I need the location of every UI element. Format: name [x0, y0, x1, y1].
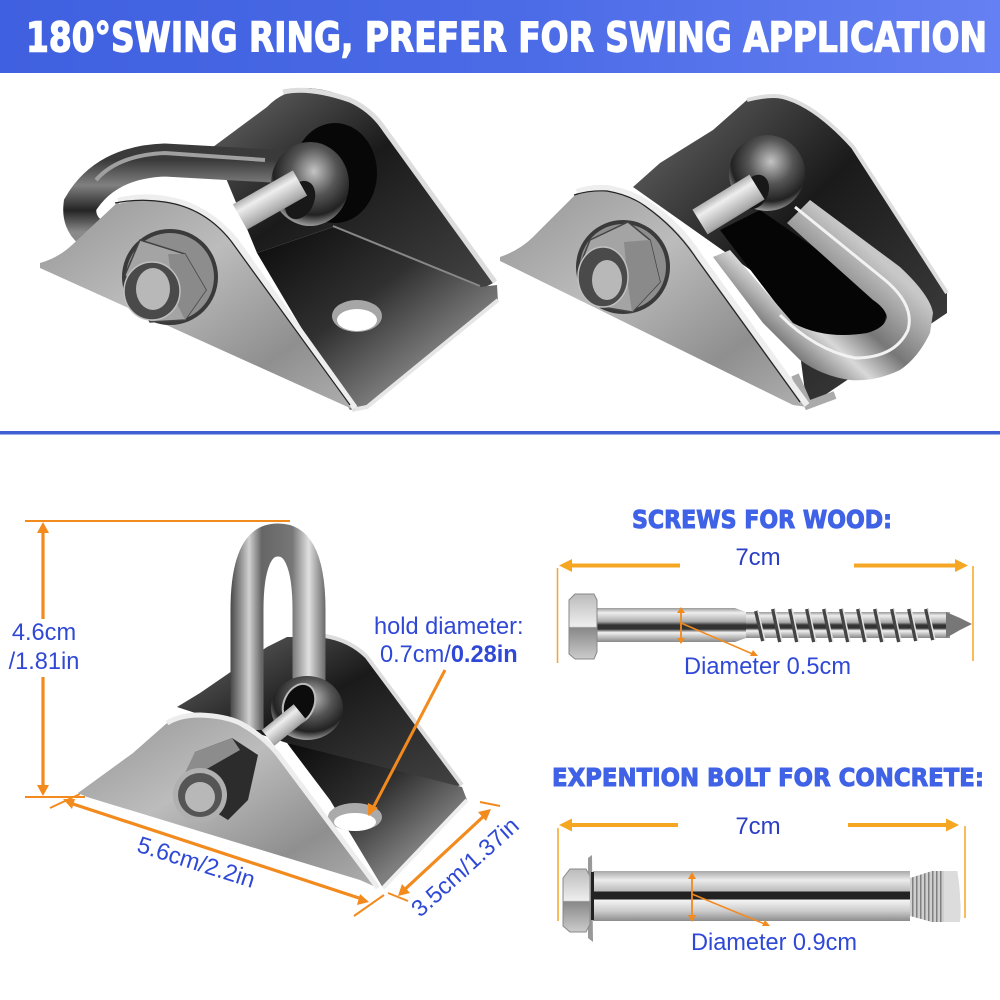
expansion bolt: [563, 855, 960, 942]
header banner: [0, 0, 1000, 73]
product photo: hook with shackle folded right: [500, 96, 947, 407]
callout arrow: [368, 670, 445, 816]
front plate: [78, 715, 378, 888]
back plate: [633, 96, 947, 407]
product photo: hook with shackle folded left: [40, 88, 498, 410]
width label: 3.5cm/1.37in: [407, 813, 525, 923]
callout: hold diameter: 0.7cm/0.28in: [380, 642, 518, 668]
front plate: [500, 188, 807, 407]
back plate: [213, 88, 495, 290]
bolt diameter label: Diameter 0.9cm: [691, 930, 857, 956]
screw diameter label: Diameter 0.5cm: [684, 654, 851, 680]
front plate: [40, 198, 355, 410]
inner shadow area: [720, 210, 890, 340]
pin: [700, 187, 757, 222]
knurled tip: [910, 871, 960, 922]
hex head: [563, 869, 590, 932]
base edge: [795, 375, 835, 405]
black recess behind eye: [293, 123, 377, 223]
screw diameter marker: [677, 607, 758, 656]
mounting hole: [328, 803, 382, 831]
hex nut and bolt: [173, 738, 258, 822]
shackle: [247, 540, 309, 730]
section divider: [0, 431, 1000, 434]
heading: screws for wood: SCREWS FOR WOOD:: [632, 505, 892, 534]
swivel eye: [271, 676, 343, 740]
base plate: [287, 743, 467, 888]
shackle: [713, 200, 933, 380]
dimension: bolt length 7cm: [558, 813, 965, 921]
dimension: screw length 7cm: [558, 544, 973, 663]
hex head: [569, 594, 597, 659]
screw thread: [745, 609, 972, 642]
hex nut: [122, 229, 218, 325]
mounting hole: [332, 300, 382, 332]
length label: 7cm: [735, 544, 781, 571]
callout: hold diameter: [368, 614, 524, 816]
pin: [268, 712, 300, 738]
length label: 5.6cm/2.2in: [134, 832, 258, 894]
bolt diameter marker: [688, 872, 770, 926]
dimension: width 3.5cm: [388, 802, 525, 923]
base plate: [257, 227, 498, 410]
shackle: [80, 160, 290, 232]
product diagram: hook with dimensions: [78, 540, 467, 888]
height label: /1.81in: [9, 649, 79, 675]
dimension: height 4.6cm: [9, 521, 290, 797]
bolt sleeve: [593, 871, 910, 921]
callout: hold diameter: hold diameter:: [374, 614, 524, 640]
hex nut: [576, 220, 670, 314]
wood screw: [569, 594, 972, 659]
back plate: [177, 637, 462, 790]
swivel eye: [729, 135, 805, 211]
screw shank: [595, 608, 746, 642]
dimension: length 5.6cm: [50, 794, 384, 916]
height label: 4.6cm: [12, 620, 76, 646]
swivel eye: [271, 142, 349, 226]
pin: [240, 183, 300, 217]
length label: 7cm: [735, 813, 781, 840]
flange washer: [588, 855, 593, 942]
